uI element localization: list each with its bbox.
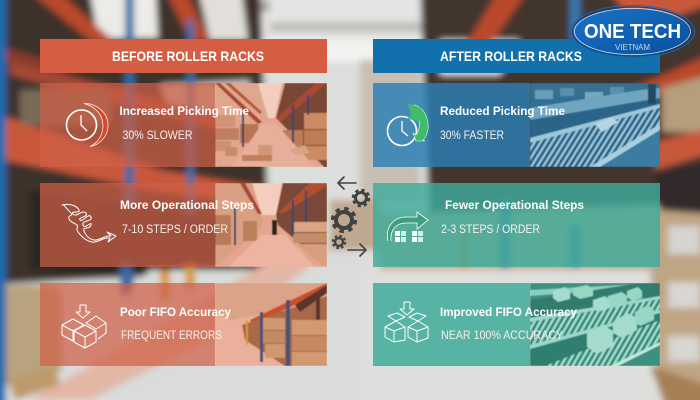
card: improved fifo accuracy: Improved FIFO Accuracy <box>440 305 577 319</box>
photo: warehouse aisle with worker <box>215 183 327 267</box>
photo: roller conveyor with cartons <box>530 283 660 366</box>
icon: clock with green arrow <box>388 103 428 146</box>
icon: two open boxes with down arrow <box>385 302 428 342</box>
photo: roller conveyor <box>530 83 660 167</box>
card: more operational steps: 7-10 STEPS / ORDER <box>122 224 228 236</box>
card: more operational steps <box>40 183 327 267</box>
card: poor fifo accuracy: FREQUENT ERRORS <box>121 330 222 342</box>
icon: centre gear <box>332 208 356 232</box>
icon: three boxes with down arrow <box>62 305 106 348</box>
icon: bottom gear <box>333 236 345 248</box>
heading: before roller racks: BEFORE ROLLER RACKS <box>112 48 264 64</box>
card: reduced picking time: Reduced Picking Time <box>440 104 565 118</box>
card: poor fifo accuracy: Poor FIFO Accuracy <box>120 305 231 319</box>
icon: top gear <box>353 190 369 206</box>
card: increased picking time: 30% SLOWER <box>122 130 192 142</box>
heading: before roller racks <box>40 39 327 73</box>
arrow: pointing to before <box>338 177 356 189</box>
arrow: pointing to after <box>348 244 366 256</box>
panel: after roller racks <box>373 39 660 366</box>
logo: One Tech Vietnam: VIETNAM <box>615 43 650 52</box>
icon: clock with speed arcs <box>66 104 108 146</box>
card: poor fifo accuracy <box>40 283 327 366</box>
card: fewer operational steps <box>373 183 660 267</box>
card: reduced picking time: 30% FASTER <box>440 130 504 142</box>
heading: after roller racks <box>373 39 660 73</box>
card: improved fifo accuracy <box>373 283 660 366</box>
card: fewer operational steps: 2-3 STEPS / ORDER <box>441 224 540 236</box>
icon: gears with swap arrows <box>332 177 369 256</box>
panel: before roller racks <box>40 39 327 366</box>
photo: warehouse aisle with scattered boxes <box>215 83 327 170</box>
heading: after roller racks: AFTER ROLLER RACKS <box>440 48 582 64</box>
card: reduced picking time <box>373 83 660 167</box>
card: increased picking time <box>40 83 327 170</box>
photo: warehouse racks with cartons <box>215 283 327 366</box>
icon: short path arrow over blocks <box>387 212 428 242</box>
card: increased picking time: Increased Picking Time <box>120 104 249 118</box>
logo: One Tech Vietnam: ONE TECH <box>584 21 681 43</box>
card: more operational steps: More Operational Steps <box>120 198 254 212</box>
icon: tangled path arrow <box>62 204 116 242</box>
card: improved fifo accuracy: NEAR 100% ACCURACY <box>441 330 563 342</box>
logo: One Tech Vietnam <box>570 6 694 58</box>
card: fewer operational steps: Fewer Operational Steps <box>445 198 584 212</box>
